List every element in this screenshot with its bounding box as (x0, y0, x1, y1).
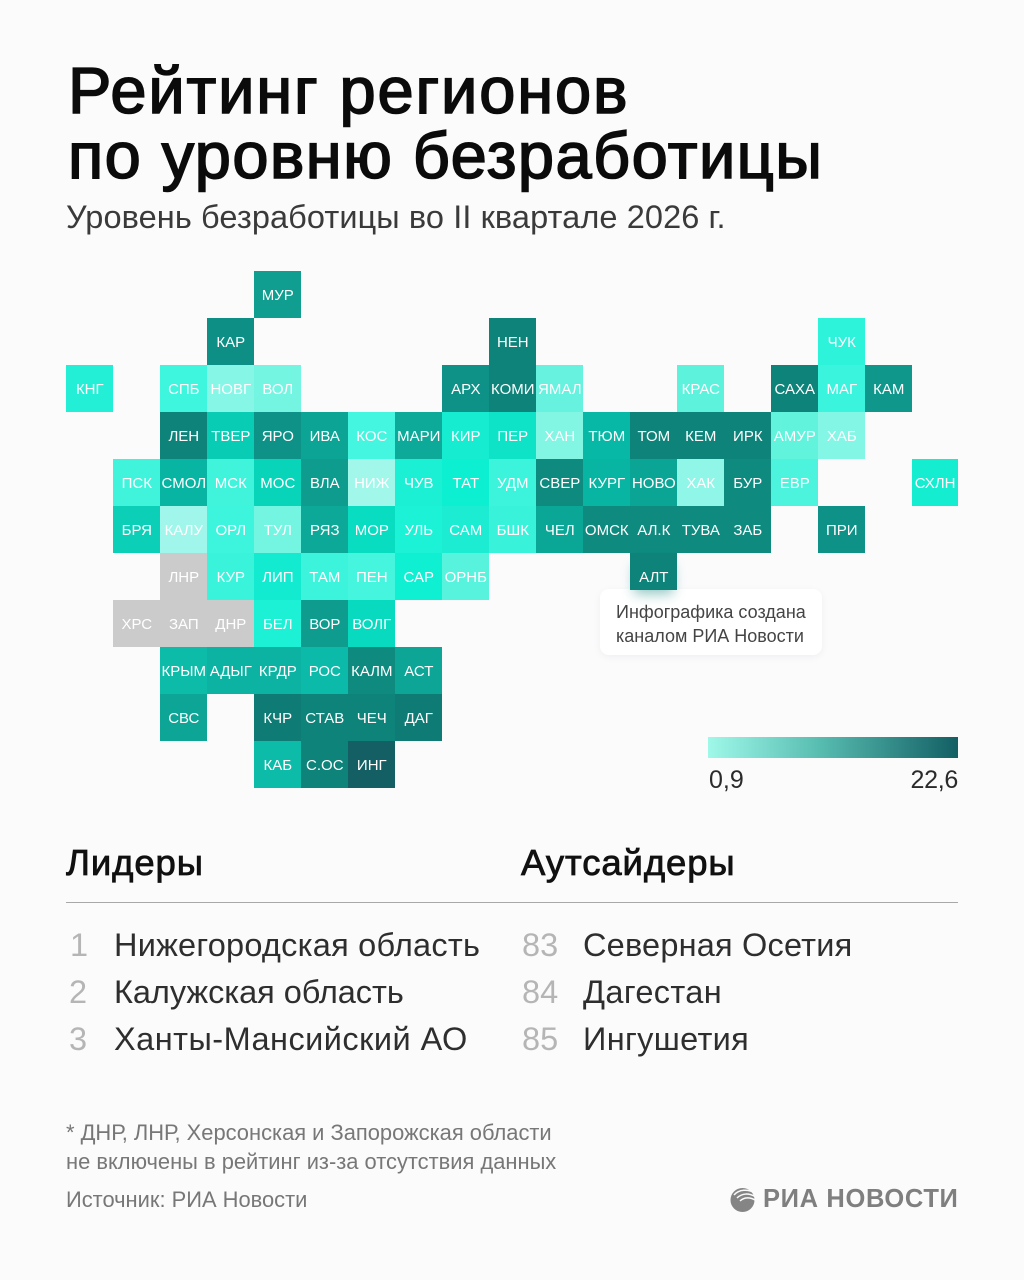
tile: ТОМ: ТОМ (637, 428, 670, 445)
tile: ОРЛ (207, 506, 254, 553)
tile: НОВГ (207, 365, 254, 412)
tile: КАМ (865, 365, 912, 412)
tile: ЗАБ (724, 506, 771, 553)
tile: ХАК (677, 459, 724, 506)
tile: ТЮМ: ТЮМ (588, 428, 625, 445)
tile: УДМ: УДМ (497, 475, 529, 492)
tile: ДНР (207, 600, 254, 647)
heading: outsiders: Аутсайдеры (521, 842, 736, 883)
tile: ВОЛГ (348, 600, 395, 647)
outsider 83: Северная Осетия (583, 927, 852, 963)
tile: УЛЬ: УЛЬ (404, 522, 433, 539)
tile: НЕН (489, 318, 536, 365)
tile map of regions (66, 271, 958, 788)
list: leaders (69, 927, 480, 1057)
tile: ЗАБ: ЗАБ (733, 522, 762, 539)
tile: САМ: САМ (449, 522, 482, 539)
tile: ЛИП (254, 553, 301, 600)
tile: РОС: РОС (309, 663, 341, 680)
tile: ТВЕР (207, 412, 254, 459)
tile: БШК: БШК (497, 522, 529, 539)
callout: channel credit: каналом РИА Новости (616, 626, 804, 646)
outsider 85: Ингушетия (583, 1021, 749, 1057)
tile: АСТ (395, 647, 442, 694)
tile: МАГ (818, 365, 865, 412)
tile: КАР (207, 318, 254, 365)
tile: МОР (348, 506, 395, 553)
tile: ВОЛГ: ВОЛГ (352, 616, 391, 633)
tile: МОР: МОР (355, 522, 389, 539)
tile: РЯЗ (301, 506, 348, 553)
tile: ИРК: ИРК (733, 428, 763, 445)
tile: АЛ.К (630, 506, 677, 553)
tile: ЧЕЛ: ЧЕЛ (545, 522, 575, 539)
icon: striped globe (730, 1188, 754, 1212)
tile: НЕН: НЕН (497, 334, 529, 351)
tile: ИВА (301, 412, 348, 459)
title (68, 54, 823, 192)
tile: ТУЛ: ТУЛ (264, 522, 292, 539)
logo wordmark: РИА НОВОСТИ (763, 1185, 959, 1213)
tile: АСТ: АСТ (404, 663, 433, 680)
legend: colour scale (708, 737, 958, 794)
tile: СМОЛ (160, 459, 207, 506)
tile: КУР (207, 553, 254, 600)
outsider 84: 84 (522, 974, 558, 1010)
tile: СХЛН (912, 459, 958, 506)
tile: ОРЛ: ОРЛ (215, 522, 246, 539)
tile: КЧР (254, 694, 301, 741)
footnote (66, 1120, 556, 1174)
tile: ВЛА (301, 459, 348, 506)
tile: КАЛМ (348, 647, 395, 694)
tile: ХАБ (818, 412, 865, 459)
tile: БРЯ (113, 506, 160, 553)
callout: channel credit (600, 589, 822, 655)
tile: КАР: КАР (216, 334, 245, 351)
tile: ТВЕР: ТВЕР (211, 428, 250, 445)
tile: МАРИ: МАРИ (397, 428, 440, 445)
tile: ПЕР: ПЕР (497, 428, 528, 445)
tile: ОМСК: ОМСК (585, 522, 629, 539)
tile: ВЛА: ВЛА (310, 475, 340, 492)
callout: channel credit: Инфографика создана (616, 602, 806, 622)
tile: ЧУВ (395, 459, 442, 506)
legend minimum: 0,9 (709, 766, 744, 794)
tile: КУР: КУР (217, 569, 245, 586)
tile: НИЖ: НИЖ (354, 475, 390, 492)
tile: БЕЛ (254, 600, 301, 647)
outsider 85: 85 (522, 1021, 558, 1057)
leader 2: Калужская область (114, 974, 404, 1010)
tile: ВОР: ВОР (309, 616, 340, 633)
legend maximum: 22,6 (911, 766, 958, 794)
tile: СПБ (160, 365, 207, 412)
tile: МУР: МУР (262, 287, 294, 304)
tile: ЯМАЛ (536, 365, 583, 412)
tile: ЧУК (818, 318, 865, 365)
tile: ПСК (113, 459, 160, 506)
leader 3: 3 (69, 1021, 87, 1057)
tile: КИР: КИР (451, 428, 481, 445)
title: Рейтинг регионов (68, 54, 629, 127)
tile: КОС (348, 412, 395, 459)
tile: КРДР: КРДР (259, 663, 297, 680)
outsider 83: 83 (522, 927, 558, 963)
tile: ЯРО: ЯРО (262, 428, 294, 445)
tile: КРЫМ: КРЫМ (162, 663, 206, 680)
title: по уровню безработицы (68, 119, 823, 192)
tile: ХАН: ХАН (544, 428, 575, 445)
tile: ТУЛ (254, 506, 301, 553)
tile: КАБ (254, 741, 301, 788)
footnote: * ДНР, ЛНР, Херсонская и Запорожская области (66, 1120, 552, 1144)
tile: КУРГ (583, 459, 630, 506)
tile: МОС: МОС (260, 475, 295, 492)
tile: ХАК: ХАК (686, 475, 715, 492)
tile: ЧУК: ЧУК (828, 334, 856, 351)
tile: КРАС: КРАС (682, 381, 720, 398)
tile: МОС (254, 459, 301, 506)
tile: ОМСК (583, 506, 630, 553)
tile: САР: САР (404, 569, 434, 586)
tile: ТОМ (630, 412, 677, 459)
tile: ВОЛ: ВОЛ (262, 381, 293, 398)
tile: СВС (160, 694, 207, 741)
tile: МАРИ (395, 412, 442, 459)
tile: МСК: МСК (215, 475, 247, 492)
divider (66, 902, 958, 903)
tile: ЧЕЧ (348, 694, 395, 741)
tile: ТЮМ (583, 412, 630, 459)
tile: РЯЗ: РЯЗ (310, 522, 340, 539)
tile: СПБ: СПБ (168, 381, 200, 398)
tile: ПРИ (818, 506, 865, 553)
leader 1: Нижегородская область (114, 927, 480, 963)
tile: АЛ.К: АЛ.К (637, 522, 670, 539)
tile: АЛТ: АЛТ (639, 569, 668, 586)
tile: АДЫГ (207, 647, 254, 694)
tile: АЛТ (630, 553, 677, 590)
tile: ПЕР (489, 412, 536, 459)
tile: ЛНР: ЛНР (168, 569, 199, 586)
tile: ЛЕН (160, 412, 207, 459)
tile: КАЛУ (160, 506, 207, 553)
tile: КРДР (254, 647, 301, 694)
tile: С.ОС: С.ОС (306, 757, 344, 774)
tile: ЛЕН: ЛЕН (168, 428, 199, 445)
tile: НОВО (630, 459, 677, 506)
tile: ТУВА (677, 506, 724, 553)
tile: УДМ (489, 459, 536, 506)
tile: ИНГ (348, 741, 395, 788)
tile: КУРГ: КУРГ (589, 475, 625, 492)
tile: КАБ: КАБ (264, 757, 292, 774)
tile: ТАМ (301, 553, 348, 600)
tile: ДАГ (395, 694, 442, 741)
tile: ЕВР (771, 459, 818, 506)
tile: ПСК: ПСК (122, 475, 152, 492)
tile: КНГ (66, 365, 113, 412)
tile: ЛНР (160, 553, 207, 600)
tile: КРАС (677, 365, 724, 412)
tile: ТАТ: ТАТ (452, 475, 479, 492)
tile: ДАГ: ДАГ (405, 710, 433, 727)
tile: ЕВР: ЕВР (780, 475, 810, 492)
tile: САМ (442, 506, 489, 553)
tile: КАЛУ: КАЛУ (165, 522, 203, 539)
tile: МСК (207, 459, 254, 506)
tile: АДЫГ: АДЫГ (210, 663, 252, 680)
tile: СТАВ (301, 694, 348, 741)
tile: КОС: КОС (356, 428, 387, 445)
tile: БШК (489, 506, 536, 553)
tile: КЕМ: КЕМ (685, 428, 716, 445)
tile: СМОЛ: СМОЛ (162, 475, 206, 492)
outsider 84: Дагестан (583, 974, 722, 1010)
tile: ВОЛ (254, 365, 301, 412)
tile: ХАБ: ХАБ (827, 428, 857, 445)
tile: ИРК (724, 412, 771, 459)
tile: СВС: СВС (168, 710, 199, 727)
tile: ОРНБ: ОРНБ (445, 569, 487, 586)
footnote: не включены в рейтинг из-за отсутствия данных (66, 1148, 556, 1174)
tile: ХРС: ХРС (121, 616, 152, 633)
tile: ТАТ (442, 459, 489, 506)
tile: КЧР: КЧР (263, 710, 292, 727)
tile: ЧЕЛ (536, 506, 583, 553)
tile: ПЕН: ПЕН (356, 569, 388, 586)
tile: АМУР (771, 412, 818, 459)
tile: ИНГ: ИНГ (357, 757, 387, 774)
outsider 84 (522, 974, 722, 1010)
tile: КАМ: КАМ (873, 381, 904, 398)
heading: leaders: Лидеры (66, 842, 204, 883)
tile: САХА: САХА (775, 381, 815, 398)
tile: КОМИ: КОМИ (491, 381, 535, 398)
tile: ВОР (301, 600, 348, 647)
tile: САР (395, 553, 442, 600)
tile: НИЖ (348, 459, 395, 506)
tile: ПЕН (348, 553, 395, 600)
legend gradient bar (708, 737, 958, 758)
tile: САХА (771, 365, 818, 412)
tile: ХРС (113, 600, 160, 647)
tile: АРХ: АРХ (451, 381, 480, 398)
tile: ЧУВ: ЧУВ (404, 475, 434, 492)
tile: ЯМАЛ: ЯМАЛ (538, 381, 582, 398)
tile: ПРИ: ПРИ (826, 522, 858, 539)
tile: КИР (442, 412, 489, 459)
tile: АРХ (442, 365, 489, 412)
tile: РОС (301, 647, 348, 694)
tile: МАГ: МАГ (826, 381, 857, 398)
tile: КОМИ (489, 365, 536, 412)
tile: ХАН (536, 412, 583, 459)
tile: ТАМ: ТАМ (309, 569, 340, 586)
tile: ИВА: ИВА (310, 428, 340, 445)
tile: СВЕР: СВЕР (539, 475, 580, 492)
tile: СВЕР (536, 459, 583, 506)
tile: БЕЛ: БЕЛ (263, 616, 293, 633)
tile: НОВО: НОВО (632, 475, 676, 492)
tile: БУР (724, 459, 771, 506)
tile: СТАВ: СТАВ (305, 710, 344, 727)
subtitle: Уровень безработицы во II квартале 2026 г. (66, 198, 726, 234)
tile: КЕМ (677, 412, 724, 459)
tile: СХЛН: СХЛН (915, 475, 955, 492)
tile: ЛИП: ЛИП (262, 569, 294, 586)
tile: УЛЬ (395, 506, 442, 553)
list: outsiders (522, 927, 852, 1057)
tile: БРЯ: БРЯ (122, 522, 152, 539)
tile: С.ОС (301, 741, 348, 788)
tile: ЯРО (254, 412, 301, 459)
tile: КНГ: КНГ (76, 381, 104, 398)
tile: ЗАП (160, 600, 207, 647)
tile: КАЛМ: КАЛМ (351, 663, 392, 680)
leader 2: 2 (69, 974, 87, 1010)
leader 1: 1 (70, 927, 88, 963)
source: Источник: РИА Новости (66, 1186, 307, 1212)
tile: МУР (254, 271, 301, 318)
leader 3: Ханты-Мансийский АО (114, 1021, 468, 1057)
tile: ЧЕЧ: ЧЕЧ (357, 710, 387, 727)
tile: ОРНБ (442, 553, 489, 600)
logo: RIA Novosti (730, 1185, 959, 1213)
tile: ДНР: ДНР (215, 616, 246, 633)
tile: АМУР: АМУР (774, 428, 816, 445)
tile: ТУВА: ТУВА (682, 522, 720, 539)
tile: КРЫМ (160, 647, 207, 694)
tile: НОВГ: НОВГ (210, 381, 251, 398)
tile: ЗАП: ЗАП (169, 616, 199, 633)
tile: БУР: БУР (733, 475, 762, 492)
